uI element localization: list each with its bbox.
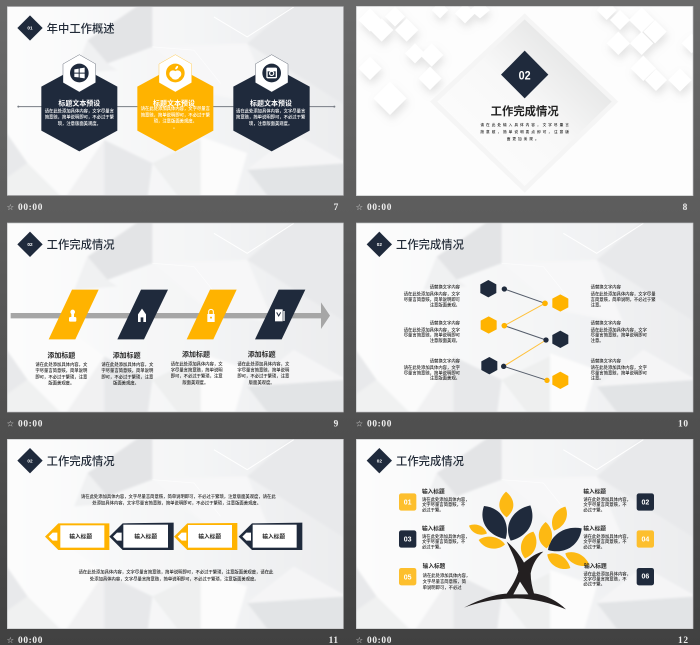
footer time: 00:00	[367, 420, 392, 430]
step 3: 字尽量言简意赅，简单说明	[171, 366, 223, 373]
slide 11: tag row	[0, 430, 353, 645]
icon: instagram	[266, 68, 277, 78]
left text blocks: 请在此处添加具体内容，文字	[404, 291, 461, 298]
tag 2: 输入标题	[134, 533, 157, 541]
item 05	[399, 562, 470, 591]
step 2: 版面美观度。	[113, 380, 139, 387]
page number: 9	[334, 420, 339, 430]
timeline line	[17, 106, 335, 108]
step 1	[35, 290, 99, 387]
section title: 工作完成情况	[491, 104, 559, 118]
step 1: 即可，不必过于繁琐，注意	[35, 373, 88, 380]
tag 1: 输入标题	[69, 533, 92, 541]
item 03: 必过于繁。	[422, 543, 444, 550]
header badge: 02	[27, 242, 33, 247]
step 3: 添加标题	[182, 350, 210, 359]
step 2: 字尽量言简意赅，简单说明	[101, 367, 154, 374]
item 06	[583, 562, 654, 588]
tree illustration	[464, 492, 589, 609]
item 01: 01	[404, 500, 412, 507]
item 05: 05	[404, 574, 412, 581]
item 01: 输入标题	[422, 488, 445, 496]
item 06: 06	[641, 573, 649, 580]
header badge	[367, 448, 392, 473]
hexagon card 3	[233, 55, 310, 151]
left text blocks: 请在此处添加具体内容，文字	[404, 364, 461, 371]
section description: 请在此处输入具体内容，文字尽量言	[480, 122, 571, 127]
item 01: 请在此处添加具体内容，	[422, 496, 470, 503]
footer time	[356, 419, 392, 430]
item 05: 文字尽量言简意赅，简	[423, 578, 467, 585]
header badge: 02	[377, 458, 382, 463]
item 01: 必过于繁。	[422, 506, 444, 513]
left text blocks: 请替换文字内容	[430, 357, 461, 364]
item 04: 文字尽量言简意赅，不	[583, 538, 627, 545]
footer time	[7, 202, 43, 213]
hexagon card 3: 标题文本预设	[250, 99, 292, 108]
step 1: 请在此处添加具体内容，文	[35, 361, 88, 368]
hexagon card 3: 请在此处添加具体内容，文字尽量言	[236, 108, 306, 115]
icon: padlock	[207, 309, 215, 322]
tag 3	[174, 523, 237, 550]
tag 4	[239, 523, 302, 550]
footer time: ☆	[7, 635, 14, 645]
icon: stamp	[69, 310, 76, 322]
hexagon card 1: 简意赅，简单说明即可，不必过于繁	[45, 114, 115, 121]
right text blocks: 请在此处添加具体内容，文字尽量	[591, 291, 656, 298]
hexagon card 1	[41, 55, 117, 151]
item 06: 文字尽量言简意赅，不	[583, 575, 627, 582]
step 3: 即可，不必过于繁琐，注意	[171, 373, 223, 380]
step 2: 即可，不必过于繁琐，注意	[101, 373, 154, 380]
item 03: 请在此处添加具体内容，	[422, 533, 470, 540]
slide 7: overview	[0, 0, 353, 213]
header badge	[17, 232, 43, 257]
title: 工作完成情况	[47, 454, 115, 468]
page number: 7	[334, 203, 339, 213]
item 03	[399, 525, 470, 550]
slide 12: tree	[347, 430, 700, 645]
step 4	[237, 290, 305, 386]
zigzag connectors	[501, 286, 550, 383]
item 03: 03	[404, 537, 412, 544]
header badge: 01	[27, 26, 33, 31]
header badge: 02	[27, 458, 33, 463]
item 06: 请在此处添加具体内容，	[583, 570, 631, 577]
footer time: ☆	[356, 419, 363, 429]
header badge	[17, 448, 43, 473]
footer time	[356, 635, 392, 645]
right text blocks: 请替换文字内容	[591, 357, 622, 364]
left text blocks: 尽量言简意赅，简单说明即可	[404, 296, 461, 303]
slide background	[0, 0, 353, 205]
slide background	[0, 430, 353, 638]
title: 工作完成情况	[47, 238, 115, 252]
slide background	[357, 7, 693, 195]
step 1: 添加标题	[47, 350, 75, 359]
step 4: 即可，不必过于繁琐，注意	[237, 373, 290, 380]
icon: notebook	[275, 309, 285, 321]
hexagon card 2	[137, 55, 213, 151]
footer time: ☆	[7, 202, 14, 212]
title: 年中工作概述	[47, 21, 115, 35]
item 02	[583, 488, 654, 513]
right text blocks	[591, 284, 656, 382]
item 04: 输入标题	[583, 525, 606, 533]
item 04	[583, 525, 654, 550]
right text blocks: 请在此处添加具体内容，文字	[591, 326, 648, 333]
item 04: 必过于繁。	[583, 543, 605, 550]
step 3	[171, 290, 237, 386]
hexagon card 1: 琐，注意版面美观度。	[58, 120, 101, 127]
footer time: ☆	[356, 635, 363, 645]
hexagon card 2: 请在此处添加具体内容，文字尽量言	[141, 105, 211, 112]
left text blocks: 请替换文字内容	[430, 320, 461, 327]
step 3: 请在此处添加具体内容，文	[171, 360, 223, 367]
item 02: 02	[641, 500, 649, 507]
left text blocks: 请在此处添加具体内容，文字	[404, 326, 461, 333]
slide 10: zigzag connection	[347, 213, 700, 430]
top paragraph: 处添加具体内容，文字尽量言简意赅，简单说明即可，不必过于繁琐，注意版面美观度。	[92, 500, 261, 507]
item 05: 请在此处添加具体内容，	[423, 572, 470, 579]
header badge: 02	[377, 242, 382, 247]
step 1: 字尽量言简意赅，简单说明	[35, 367, 88, 374]
right text blocks: 注意。	[591, 337, 604, 344]
bottom paragraph: 处添加具体内容，文字尽量言简意赅，简单说明即可，不必过于繁琐，注意版面美观度。	[90, 575, 259, 582]
right text blocks: 请替换文字内容	[591, 284, 622, 291]
right text blocks: 言简意赅，简单说明，不必过于繁	[591, 296, 656, 303]
step 2: 添加标题	[113, 350, 141, 359]
arrow	[11, 302, 330, 329]
item 03: 文字尽量言简意赅，不	[422, 538, 466, 545]
slide background	[0, 213, 353, 422]
left text blocks: 请替换文字内容	[430, 284, 461, 291]
top paragraph: 请在此处添加具体内容，文字尽量言简意赅，简单说明即可，不必过于繁琐，注意版面美观度，请在此	[81, 493, 276, 500]
right text blocks: 请替换文字内容	[591, 320, 622, 327]
icon: house	[138, 309, 146, 322]
tag 4: 输入标题	[262, 533, 285, 541]
item 01	[399, 488, 470, 513]
footer time	[356, 202, 392, 213]
bottom paragraph: 请在此处添加具体内容，文字尽量言简意赅，简单说明即可，不必过于繁琐，注意版面美观度，请在此	[79, 568, 274, 575]
item 02: 文字尽量言简意赅，不	[583, 501, 627, 508]
item 02: 必过于繁。	[583, 506, 605, 513]
right text blocks: 注意。	[591, 375, 604, 382]
item 04: 04	[641, 537, 649, 544]
section description: 简意赅，简单说明要点即可，注意版	[480, 129, 571, 134]
item 02: 请在此处添加具体内容，	[583, 496, 631, 503]
hexagon card 3: 琐，注意版面美观度。	[249, 120, 292, 127]
page number: 10	[678, 420, 689, 430]
title: 工作完成情况	[396, 454, 465, 468]
hexagon card 3: 简意赅，简单说明即可，不必过于繁	[236, 114, 306, 121]
step 3: 版面美观度。	[182, 379, 208, 386]
tag 2	[109, 523, 174, 550]
central diamond frame	[430, 13, 618, 193]
item 02: 输入标题	[583, 488, 606, 496]
left text blocks: 注意版面美观。	[430, 301, 460, 308]
hexagon card 2: 简意赅，简单说明即可，不必过于繁	[141, 111, 211, 118]
hexagon nodes	[480, 280, 568, 389]
item 04: 请在此处添加具体内容，	[583, 533, 631, 540]
footer time: 00:00	[367, 203, 392, 213]
footer time	[7, 419, 43, 430]
tag 1	[45, 523, 109, 550]
header badge	[17, 15, 43, 41]
hexagon card 1: 请在此处添加具体内容，文字尽量言	[45, 108, 115, 115]
right text blocks: 注意。	[591, 301, 604, 308]
hexagon card 2: 标题文本预设	[153, 99, 195, 108]
left text blocks	[404, 284, 461, 382]
tag 3: 输入标题	[198, 533, 221, 541]
right text blocks: 尽量言简意赅，简单说明即可	[591, 369, 648, 376]
hexagon card 2: 。	[173, 125, 177, 130]
section number diamond: 02	[519, 68, 531, 82]
left text blocks: 尽量言简意赅，简单说明即可	[404, 369, 461, 376]
header badge	[367, 232, 392, 257]
footer time: ☆	[7, 419, 14, 429]
step 4: 版面美观度。	[249, 379, 275, 386]
footer time: 00:00	[18, 203, 43, 213]
hexagon card 1: 标题文本预设	[58, 99, 100, 108]
title: 工作完成情况	[396, 238, 465, 252]
item 06: 输入标题	[584, 562, 607, 570]
decorative squares	[361, 6, 693, 119]
footer time	[7, 635, 43, 645]
slide background	[347, 213, 700, 422]
left text blocks: 注意版面美观。	[430, 375, 460, 382]
step 1: 版面美观度。	[48, 380, 74, 387]
step 4: 添加标题	[248, 350, 276, 359]
footer time: 00:00	[18, 420, 43, 430]
step 4: 请在此处添加具体内容，文	[237, 360, 290, 367]
icon: windows	[74, 68, 85, 78]
item 01: 文字尽量言简意赅，不	[422, 501, 466, 508]
icon: apple	[169, 65, 181, 80]
item 06: 必过于繁。	[583, 581, 605, 588]
left text blocks: 尽量言简意赅，简单说明即可	[404, 332, 461, 339]
right text blocks: 请在此处添加具体内容，文字	[591, 364, 648, 371]
item 05: 输入标题	[423, 562, 446, 570]
section number diamond	[501, 51, 548, 98]
left text blocks: 注意版面美观。	[430, 337, 460, 344]
slide 8: section divider	[356, 0, 700, 213]
step 4: 字尽量言简意赅，简单说明	[237, 366, 290, 373]
step 2	[101, 290, 168, 387]
slide 9: parallelogram timeline	[0, 213, 353, 430]
item 03: 输入标题	[422, 525, 445, 533]
footer time: ☆	[356, 202, 363, 212]
section description: 面更加美观。	[507, 136, 541, 141]
page number: 8	[683, 203, 688, 213]
slide background	[347, 430, 700, 638]
right text blocks: 尽量言简意赅，简单说明即可	[591, 332, 648, 339]
item 05: 单说明即可，不必过	[423, 584, 462, 591]
hexagon card 2: 琐，注意版面美观度。	[154, 118, 197, 125]
step 2: 请在此处添加具体内容，文	[101, 361, 154, 368]
